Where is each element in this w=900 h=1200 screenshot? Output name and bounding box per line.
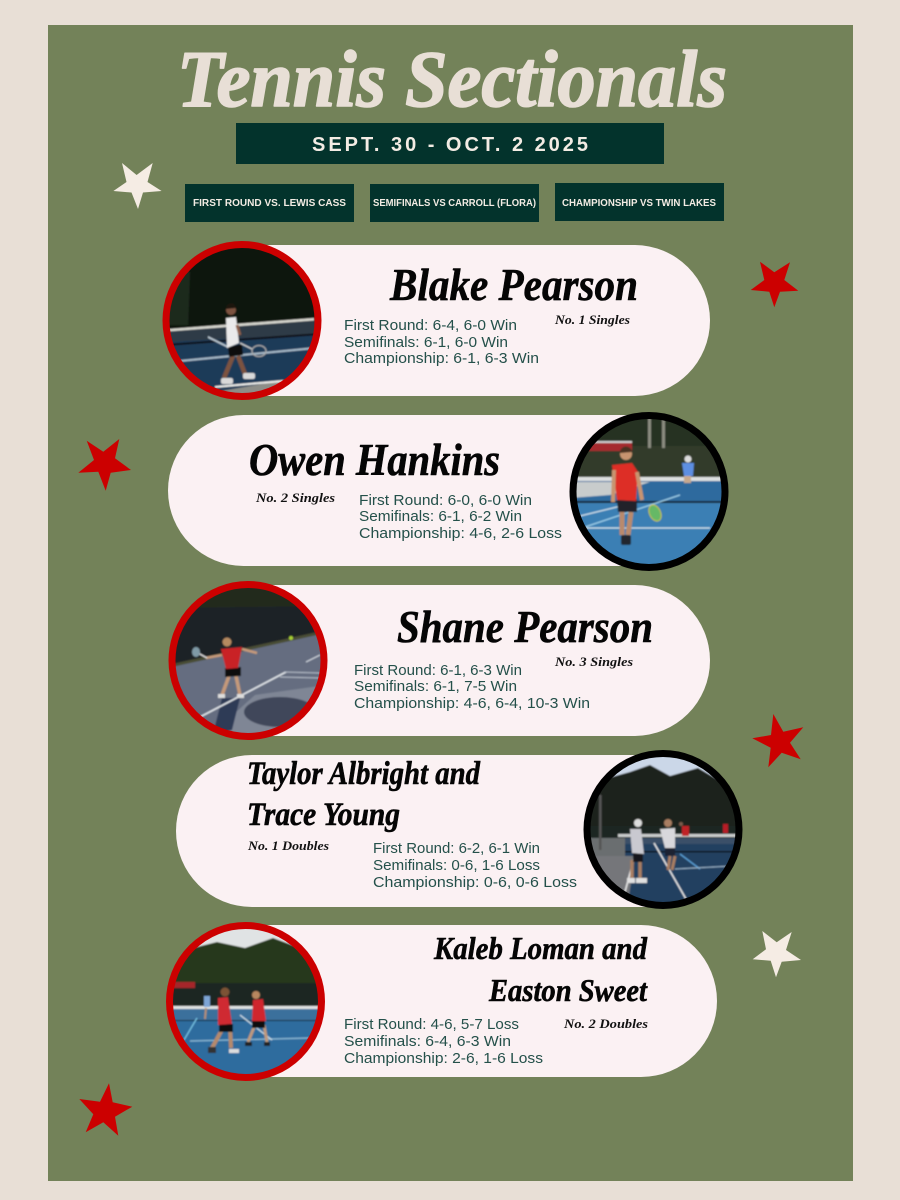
player names: [433, 930, 648, 1008]
photo ring: [170, 926, 322, 1078]
player name: Blake Pearson: [389, 260, 638, 310]
position: No. 2 Doubles: [563, 1016, 648, 1031]
position: No. 1 Doubles: [247, 838, 329, 853]
panel: Owen Hankins: [168, 412, 730, 573]
photo ring: [166, 244, 318, 396]
scores: Championship: 4-6, 6-4, 10-3 Win: [354, 696, 590, 712]
scores: First Round: 6-1, 6-3 Win: [354, 663, 522, 679]
photo: Shane Pearson: [176, 588, 320, 733]
photo: Blake Pearson: [170, 248, 314, 393]
round tag: championship: CHAMPIONSHIP VS TWIN LAKES: [562, 197, 716, 209]
star: cream right: [753, 931, 801, 977]
panel: Kaleb Loman and Easton Sweet: [168, 925, 717, 1081]
panel: Taylor Albright and Trace Young: [176, 750, 742, 910]
scores: First Round: 6-4, 6-0 Win: [344, 318, 517, 334]
scores: First Round: 4-6, 5-7 Loss: [344, 1017, 519, 1033]
position: No. 2 Singles: [255, 490, 335, 505]
round tag: semifinals: SEMIFINALS VS CARROLL (FLORA): [373, 197, 536, 209]
scores: Championship: 2-6, 1-6 Loss: [344, 1051, 543, 1067]
scores: Championship: 4-6, 2-6 Loss: [359, 526, 562, 542]
photo ring: [587, 754, 739, 906]
round tag: semifinals: [370, 184, 539, 222]
position: No. 3 Singles: [554, 654, 633, 669]
star: red right: [752, 714, 803, 767]
star: red top right: [751, 262, 798, 307]
panel: Blake Pearson: [165, 244, 710, 400]
panel: Shane Pearson: [170, 582, 710, 740]
scores: First Round: 6-0, 6-0 Win: [359, 493, 532, 509]
round tag: first round: [185, 184, 354, 222]
player name: Shane Pearson: [397, 602, 653, 652]
scores: Semifinals: 6-1, 6-2 Win: [359, 509, 522, 525]
date banner: [236, 123, 664, 164]
date banner: SEPT. 30 - OCT. 2 2025: [312, 134, 588, 156]
scores: [359, 493, 562, 542]
player name: Owen Hankins: [249, 435, 500, 485]
scores: [344, 318, 539, 367]
photo ring: [573, 416, 725, 568]
scores: Championship: 6-1, 6-3 Win: [344, 351, 539, 367]
scores: [373, 841, 577, 891]
scores: Semifinals: 6-4, 6-3 Win: [344, 1034, 511, 1050]
scores: Semifinals: 6-1, 7-5 Win: [354, 679, 517, 695]
player names: Kaleb Loman and: [433, 930, 648, 966]
player names: Trace Young: [247, 797, 400, 833]
scores: Semifinals: 0-6, 1-6 Loss: [373, 858, 540, 874]
scores: Championship: 0-6, 0-6 Loss: [373, 875, 577, 891]
photo: Owen Hankins: [576, 419, 722, 564]
player names: [247, 756, 480, 833]
round tag: championship: [555, 183, 724, 221]
player names: Easton Sweet: [488, 972, 648, 1008]
star: cream top left: [113, 163, 162, 209]
player names: Taylor Albright and: [247, 756, 480, 792]
scores: [354, 663, 590, 712]
photo: Taylor Albright and Trace Young: [590, 757, 736, 902]
title: Tennis Sectionals: [177, 36, 727, 124]
scores: [344, 1017, 543, 1067]
star: red left: [78, 439, 131, 491]
round tag: first round: FIRST ROUND VS. LEWIS CASS: [193, 197, 346, 209]
photo ring: [172, 584, 324, 736]
photo: Kaleb Loman and Easton Sweet: [173, 929, 318, 1074]
position: No. 1 Singles: [554, 312, 630, 327]
scores: Semifinals: 6-1, 6-0 Win: [344, 335, 508, 351]
star: red bottom left: [79, 1083, 132, 1136]
scores: First Round: 6-2, 6-1 Win: [373, 841, 540, 857]
